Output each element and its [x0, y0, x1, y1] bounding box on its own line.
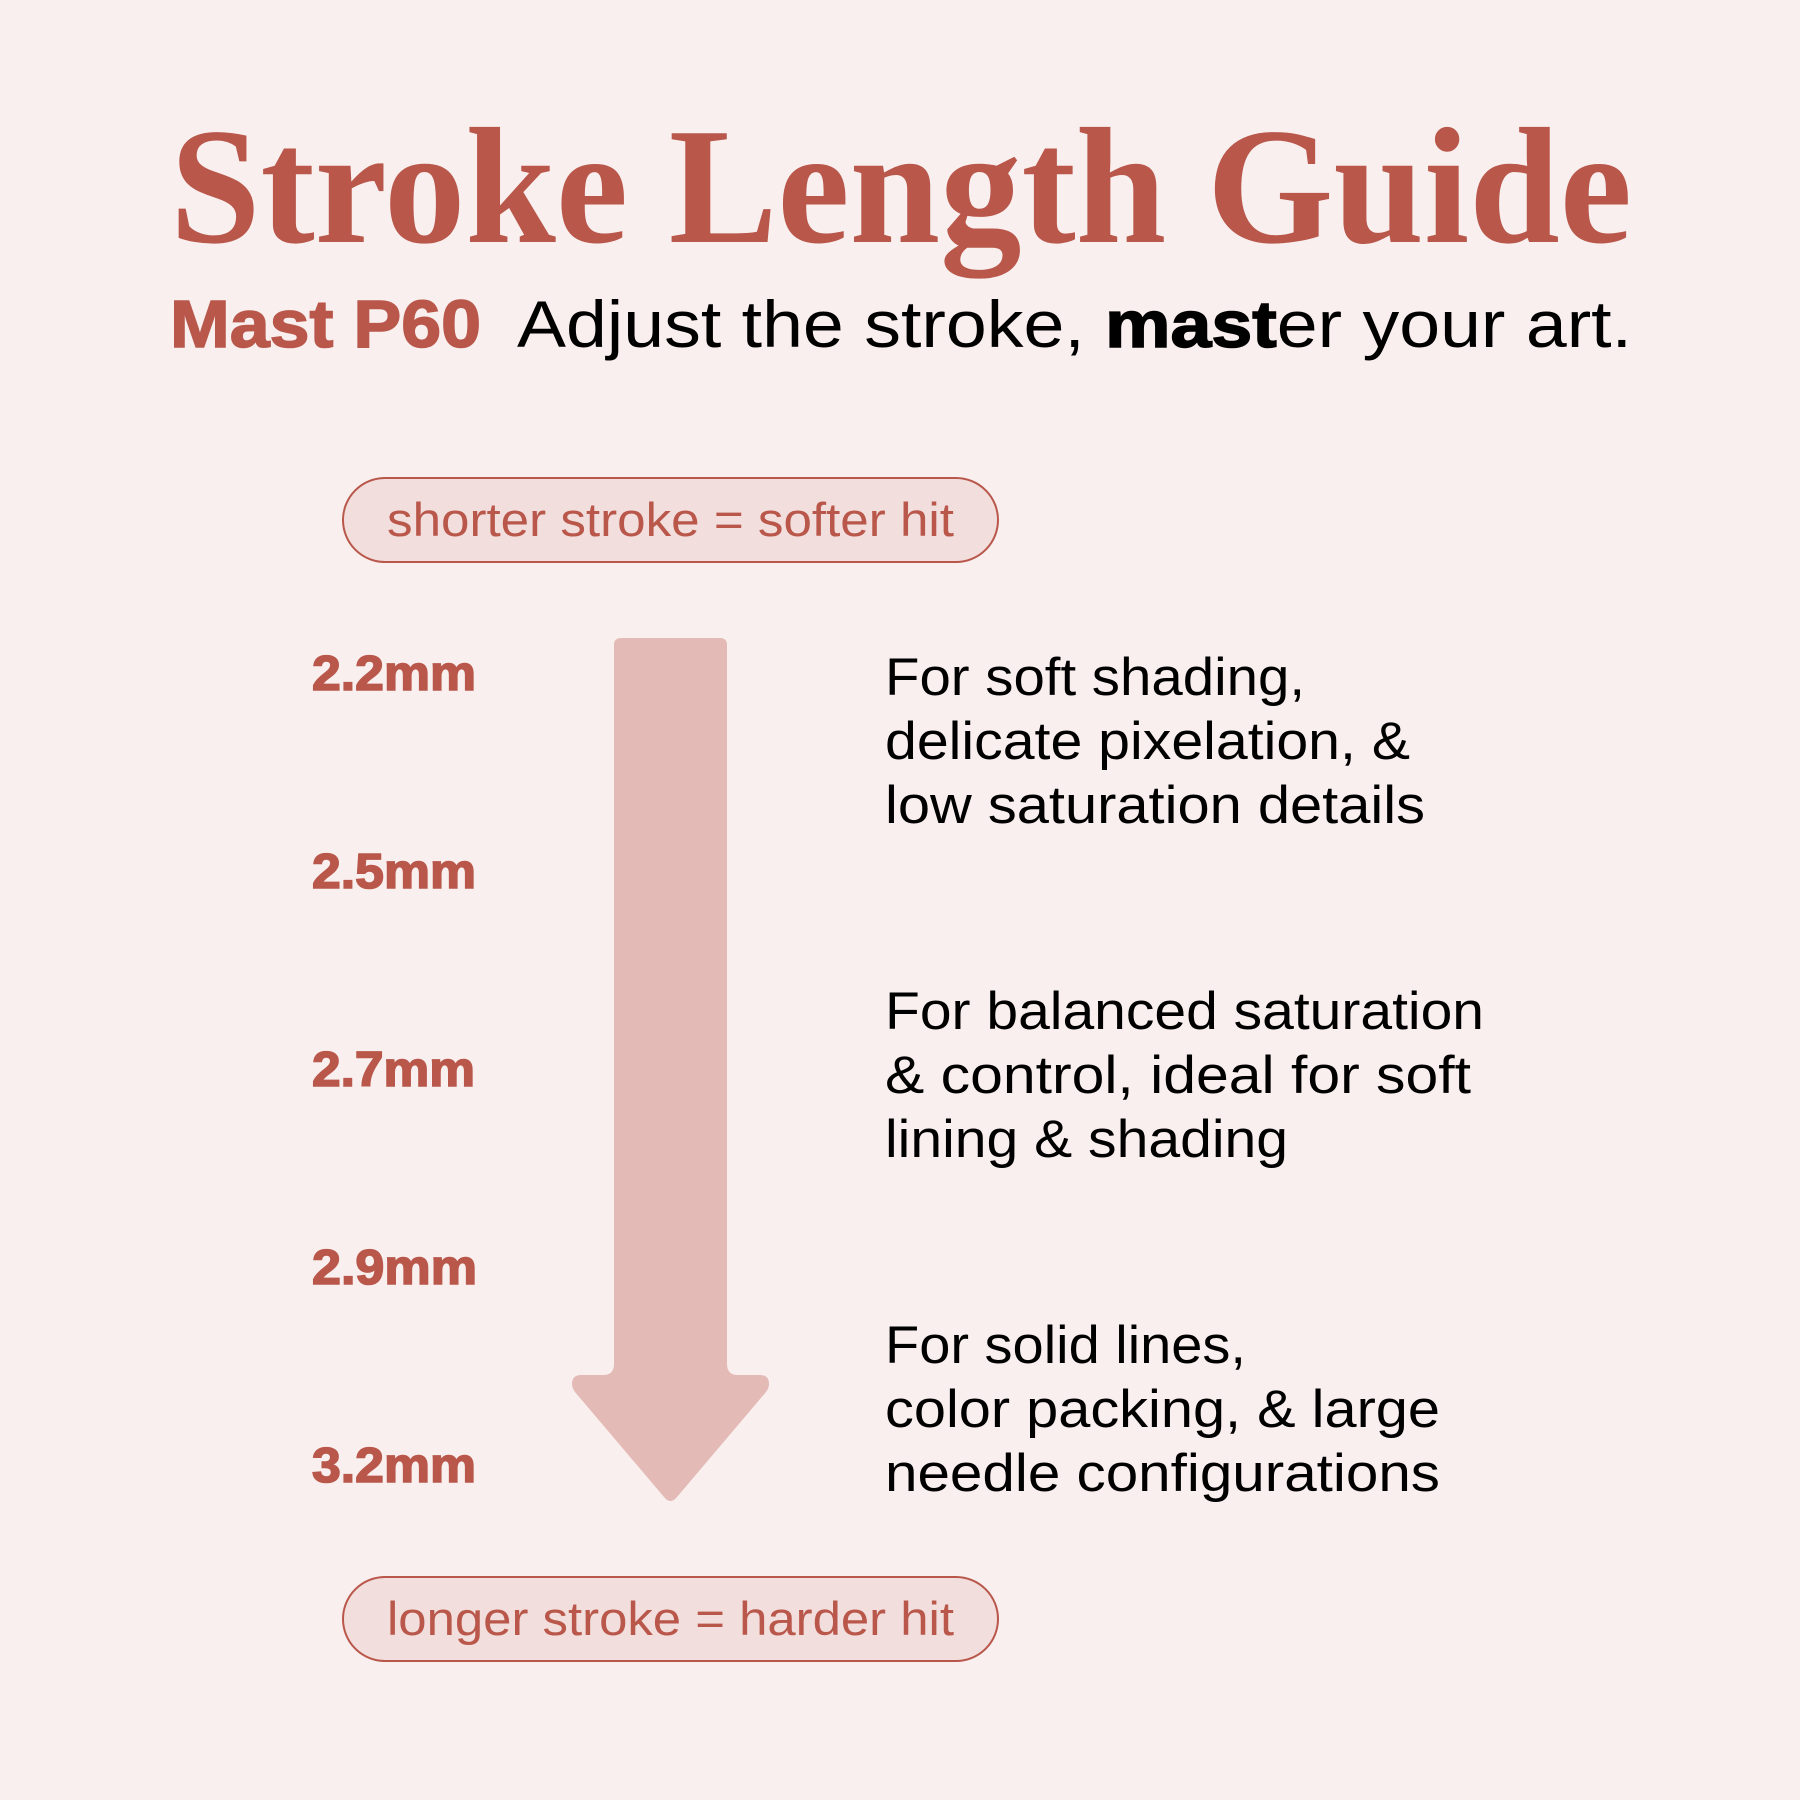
label: 3.2mm: 3.2mm — [312, 1439, 476, 1493]
label: 2.2mm: 2.2mm — [312, 647, 476, 701]
label: 2.7mm: 2.7mm — [312, 1043, 475, 1097]
pill: longer stroke: longer stroke = harder hit — [387, 1592, 954, 1645]
pill: shorter stroke — [343, 478, 998, 562]
description: solid lines: color packing, & large — [885, 1380, 1440, 1439]
stroke length labels — [312, 647, 477, 1493]
description: balanced saturation: lining & shading — [885, 1110, 1288, 1169]
description: soft shading: For soft shading, — [885, 648, 1305, 707]
label: 2.9mm: 2.9mm — [312, 1241, 477, 1295]
description: balanced saturation — [885, 982, 1484, 1169]
arrow: pointing down — [572, 638, 769, 1501]
description: soft shading — [885, 648, 1425, 835]
tagline: Adjust the stroke, mast er your art. — [517, 287, 1632, 361]
pill: longer stroke — [343, 1577, 998, 1661]
description: soft shading: low saturation details — [885, 776, 1425, 835]
subtitle — [170, 287, 1632, 362]
label: 2.5mm: 2.5mm — [312, 845, 476, 899]
pill: shorter stroke: shorter stroke = softer hit — [387, 493, 954, 546]
description: balanced saturation: & control, ideal for soft — [885, 1046, 1471, 1105]
description: solid lines — [885, 1316, 1440, 1503]
description: soft shading: delicate pixelation, & — [885, 712, 1410, 771]
description: solid lines: For solid lines, — [885, 1316, 1246, 1375]
description: solid lines: needle configurations — [885, 1444, 1440, 1503]
title: Stroke Length Guide — [170, 94, 1632, 279]
description: balanced saturation: For balanced saturation — [885, 982, 1484, 1041]
product name: Mast P60 — [170, 287, 481, 362]
